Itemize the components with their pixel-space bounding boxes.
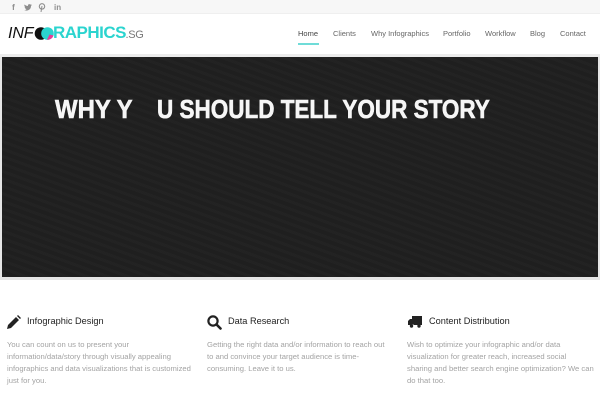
text: Content Distribution (407, 340, 594, 384)
logo circles (34, 27, 54, 40)
nav: active underline (298, 43, 319, 45)
icon: truck (408, 316, 422, 328)
text: Infographic Design: You can count on us to present your (7, 340, 129, 348)
logo text: RAPHICS: RAPHICS (53, 23, 126, 42)
text: Infographic Design (6, 340, 191, 384)
text: Infographic Design: infographics and data visualizations that is customized (7, 364, 191, 372)
header divider (0, 54, 600, 57)
nav: Why Infographics: Why Infographics (371, 29, 429, 38)
text: Content Distribution: do that too. (407, 376, 445, 384)
text: Data Research: consuming. Leave it to us. (207, 364, 296, 372)
text: Infographic Design: information/data/story through visually appealing (7, 352, 171, 360)
hero frame (0, 57, 600, 280)
nav: Portfolio: Portfolio (443, 29, 471, 38)
social icons: f (12, 2, 15, 12)
logo text: .SG: .SG (126, 29, 144, 41)
text: Data Research: to and convince your target audience is time- (207, 352, 359, 360)
nav: Workflow: Workflow (485, 29, 516, 38)
navigation (298, 29, 586, 45)
text: Content Distribution: Wish to optimize your infographic and/or data (407, 340, 560, 348)
icon: magnifier (207, 315, 222, 330)
heading: Data Research: Data Research (228, 316, 289, 326)
text: Data Research (207, 340, 385, 372)
nav: Contact: Contact (560, 29, 586, 38)
heading: Infographic Design: Infographic Design (27, 316, 104, 326)
nav: Home: Home (298, 29, 318, 38)
nav: Clients: Clients (333, 29, 356, 38)
nav: Blog: Blog (530, 29, 545, 38)
text: Content Distribution: sharing and better search engine optimization? We can (407, 364, 594, 372)
logo text: INF: INF (8, 25, 33, 42)
heading: Content Distribution: Content Distribution (429, 316, 510, 326)
text: Data Research: Getting the right data and/or information to reach out (207, 340, 385, 348)
text: Content Distribution: visualization for greater reach, increased social (407, 352, 566, 360)
hero panel (2, 57, 598, 277)
logo (8, 23, 144, 42)
text: Infographic Design: just for you. (7, 376, 46, 384)
icon: pencil (7, 315, 21, 329)
hero title: WHY Y (55, 94, 133, 124)
hero title: U SHOULD TELL YOUR STORY (157, 94, 490, 124)
social icons: in (54, 3, 61, 12)
social icons (12, 2, 61, 12)
top bar (0, 0, 600, 14)
